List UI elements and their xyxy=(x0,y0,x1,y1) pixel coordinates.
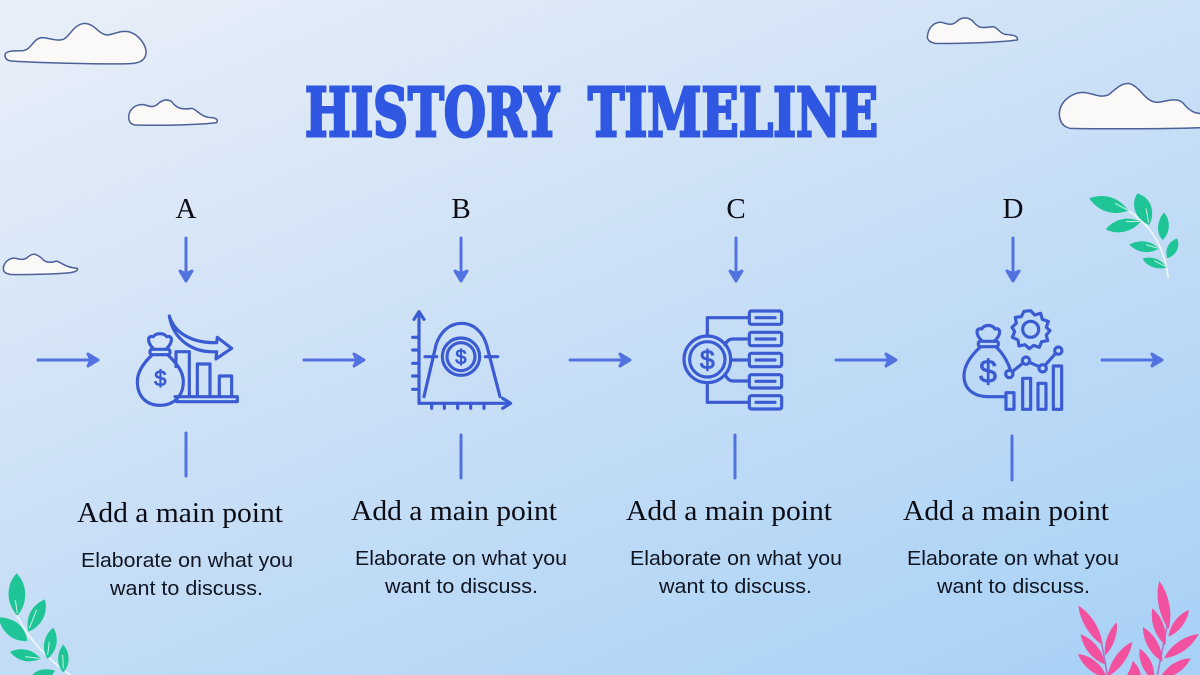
text block B xyxy=(351,495,567,598)
connector line D xyxy=(1010,436,1014,480)
text block C xyxy=(626,495,842,598)
leaves: top right green xyxy=(1089,193,1178,278)
arrow: down B xyxy=(455,238,467,281)
arrow: timeline 5 xyxy=(1102,354,1162,366)
arrow: down C xyxy=(730,238,742,281)
text block B: want to discuss. xyxy=(384,575,538,598)
arrow: down D xyxy=(1007,238,1019,281)
connector line C xyxy=(734,435,736,478)
cloud: top left small xyxy=(129,100,217,125)
text block D: Elaborate on what you xyxy=(907,547,1119,570)
icon: bell curve with coin xyxy=(413,312,511,408)
icon: coin with flow boxes: $ xyxy=(700,345,715,375)
connector line A xyxy=(184,433,188,476)
cloud: left middle xyxy=(3,254,77,275)
icon: bell curve with coin: $ xyxy=(455,347,467,369)
text block A xyxy=(77,497,293,600)
column B heading: B xyxy=(451,193,471,225)
arrow: timeline 1 xyxy=(38,354,98,366)
arrow: down A xyxy=(180,238,192,281)
cloud: top left large xyxy=(5,23,146,64)
cloud: top right large xyxy=(1059,83,1200,129)
column A heading: A xyxy=(176,193,197,225)
icon: money bag with falling bars xyxy=(137,316,237,405)
text block C: want to discuss. xyxy=(658,575,812,598)
icon: money bag with falling bars: $ xyxy=(154,366,166,391)
icon: coin with flow boxes xyxy=(684,311,782,409)
text block C: Elaborate on what you xyxy=(630,547,842,570)
connector line B xyxy=(460,435,462,478)
cloud: top right small xyxy=(927,18,1017,43)
text block A: want to discuss. xyxy=(109,577,263,600)
text block A: Elaborate on what you xyxy=(81,549,293,572)
text block D: Add a main point xyxy=(903,495,1109,527)
column C heading: C xyxy=(726,193,746,225)
icon: money bag with gear and growth chart xyxy=(964,311,1062,409)
column D heading: D xyxy=(1003,193,1023,225)
arrow: timeline 2 xyxy=(304,354,364,366)
title xyxy=(305,73,878,152)
arrow: timeline 3 xyxy=(570,354,630,366)
title: TIMELINE xyxy=(588,73,878,152)
text block B: Elaborate on what you xyxy=(355,547,567,570)
text block D: want to discuss. xyxy=(936,575,1090,598)
text block D xyxy=(903,495,1119,598)
title: HISTORY xyxy=(305,73,560,152)
text block A: Add a main point xyxy=(77,497,283,529)
text block B: Add a main point xyxy=(351,495,557,527)
arrow: timeline 4 xyxy=(836,354,896,366)
leaves: bottom right pink xyxy=(1078,581,1199,675)
icon: money bag with gear and growth chart: $ xyxy=(979,354,997,390)
text block C: Add a main point xyxy=(626,495,832,527)
leaves: bottom left green xyxy=(0,573,71,675)
